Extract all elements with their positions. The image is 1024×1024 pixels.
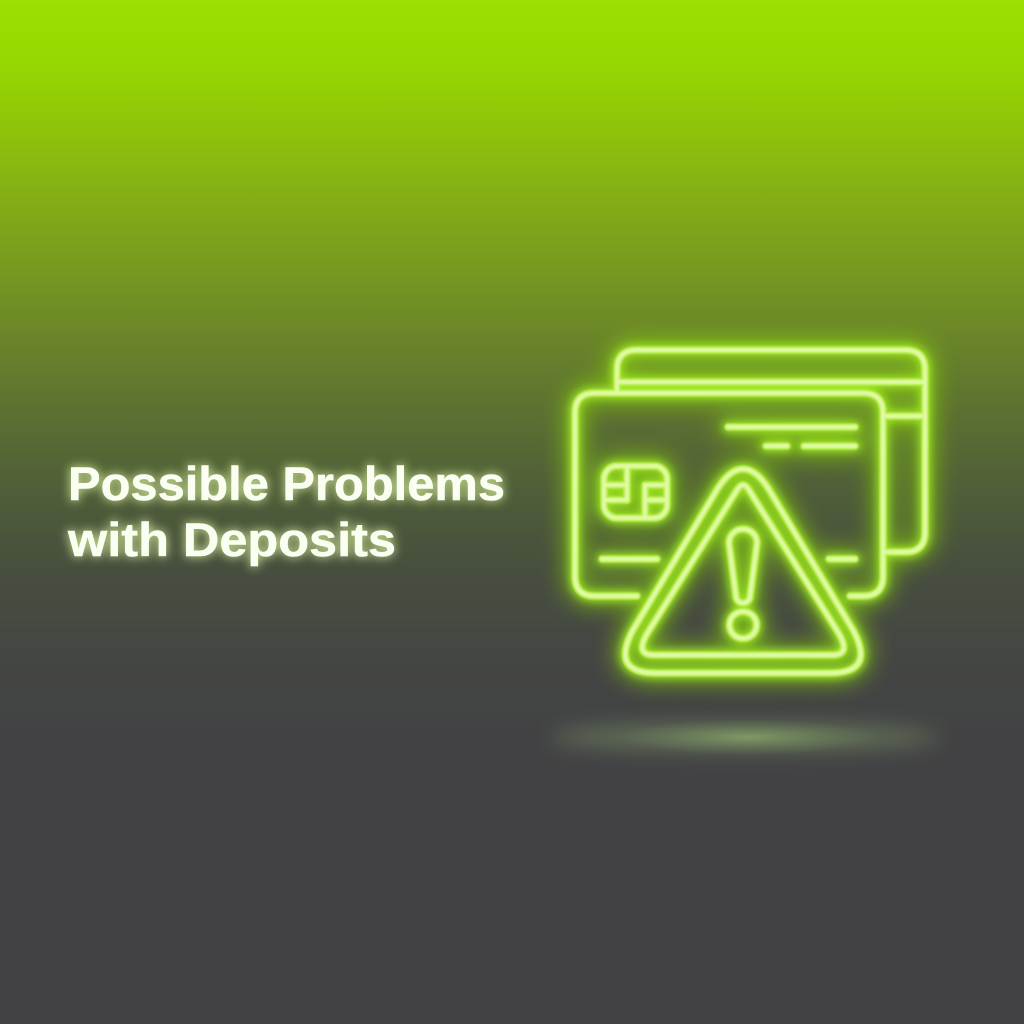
title text (67, 457, 505, 566)
icon: neon credit cards with warning triangle (575, 350, 925, 673)
icon tube (575, 350, 925, 673)
icon wide glow (575, 350, 925, 673)
title glow: Possible Problems (68, 457, 505, 510)
title glow: with Deposits (67, 513, 396, 566)
title glow (67, 457, 505, 566)
title text: with Deposits (67, 513, 396, 566)
title text: Possible Problems (68, 457, 505, 510)
title (67, 457, 505, 566)
icon near glow (575, 350, 925, 673)
icon tube core (575, 350, 925, 673)
floor glow reflection (550, 719, 940, 755)
